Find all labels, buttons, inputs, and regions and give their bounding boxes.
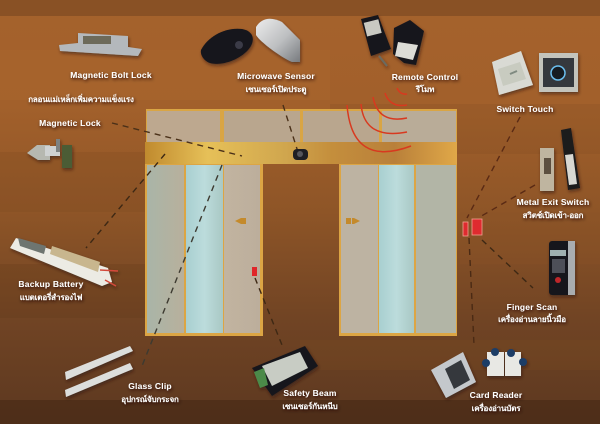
icon: microwave sensor photos bbox=[201, 19, 300, 64]
microwave sensor on header bbox=[293, 149, 308, 160]
red access control boxes bbox=[463, 219, 482, 236]
label: finger scan: เครื่องอ่านลายนิ้วมือ bbox=[498, 313, 566, 324]
label: microwave sensor: เซนเซอร์เปิดประตู bbox=[246, 84, 306, 95]
icon: safety beam controller bbox=[252, 346, 318, 396]
right sliding door bbox=[339, 164, 457, 336]
left sliding door bbox=[145, 164, 263, 336]
label: finger scan: Finger Scan bbox=[507, 302, 557, 312]
label: microwave sensor: Microwave Sensor bbox=[237, 71, 315, 81]
label: magnetic lock: Magnetic Lock bbox=[39, 118, 101, 128]
gold header bar bbox=[145, 142, 457, 164]
icon: card reader and key tags bbox=[431, 348, 527, 398]
label: Thai magnetic lock note: กลอนแม่เหล็กเพิ่มความแข็งแรง bbox=[28, 93, 134, 104]
label: backup battery: Backup Battery bbox=[18, 279, 84, 289]
label: magnetic bolt lock: Magnetic Bolt Lock bbox=[70, 70, 152, 80]
label: safety beam: เซนเซอร์กันหนีบ bbox=[282, 401, 338, 411]
automatic door frame bbox=[145, 109, 457, 336]
label: metal exit switch bbox=[517, 197, 589, 220]
label: switch touch: Switch Touch bbox=[496, 104, 554, 114]
label: glass clip bbox=[121, 381, 179, 405]
icon: magnetic bolt lock bbox=[59, 33, 142, 56]
icon: remote controls bbox=[361, 15, 424, 66]
icon: metal exit switches bbox=[540, 128, 580, 191]
icon: switch touch bbox=[492, 51, 578, 95]
label: backup battery: แบตเตอรี่สำรองไฟ bbox=[20, 291, 83, 302]
icon: magnetic lock bbox=[27, 139, 72, 168]
dashed connector lines bbox=[86, 105, 535, 366]
label: glass clip: อุปกรณ์จับกระจก bbox=[121, 394, 179, 405]
label: metal exit switch: สวิตช์เปิดเข้า-ออก bbox=[523, 210, 584, 220]
icon: finger scan terminal bbox=[549, 241, 575, 295]
label: safety beam: Safety Beam bbox=[283, 388, 337, 398]
label: finger scan bbox=[498, 302, 566, 324]
label: remote control bbox=[392, 72, 458, 94]
label: remote control: รีโมท bbox=[415, 84, 434, 94]
remote signal arcs bbox=[347, 88, 411, 152]
icon: glass clips bbox=[65, 346, 133, 397]
label: remote control: Remote Control bbox=[392, 72, 458, 82]
label: card reader: เครื่องอ่านบัตร bbox=[472, 402, 521, 413]
label: card reader bbox=[470, 390, 523, 413]
label: backup battery bbox=[18, 279, 84, 302]
label: metal exit switch: Metal Exit Switch bbox=[517, 197, 589, 207]
label: card reader: Card Reader bbox=[470, 390, 523, 400]
label: microwave sensor bbox=[237, 71, 315, 95]
label: safety beam bbox=[282, 388, 338, 411]
door handle bbox=[346, 218, 360, 224]
label: glass clip: Glass Clip bbox=[128, 381, 172, 391]
red sensor on left door bbox=[252, 267, 257, 276]
transom glass panels bbox=[146, 109, 457, 145]
door handle bbox=[235, 218, 246, 224]
icon: backup battery bbox=[10, 238, 118, 286]
